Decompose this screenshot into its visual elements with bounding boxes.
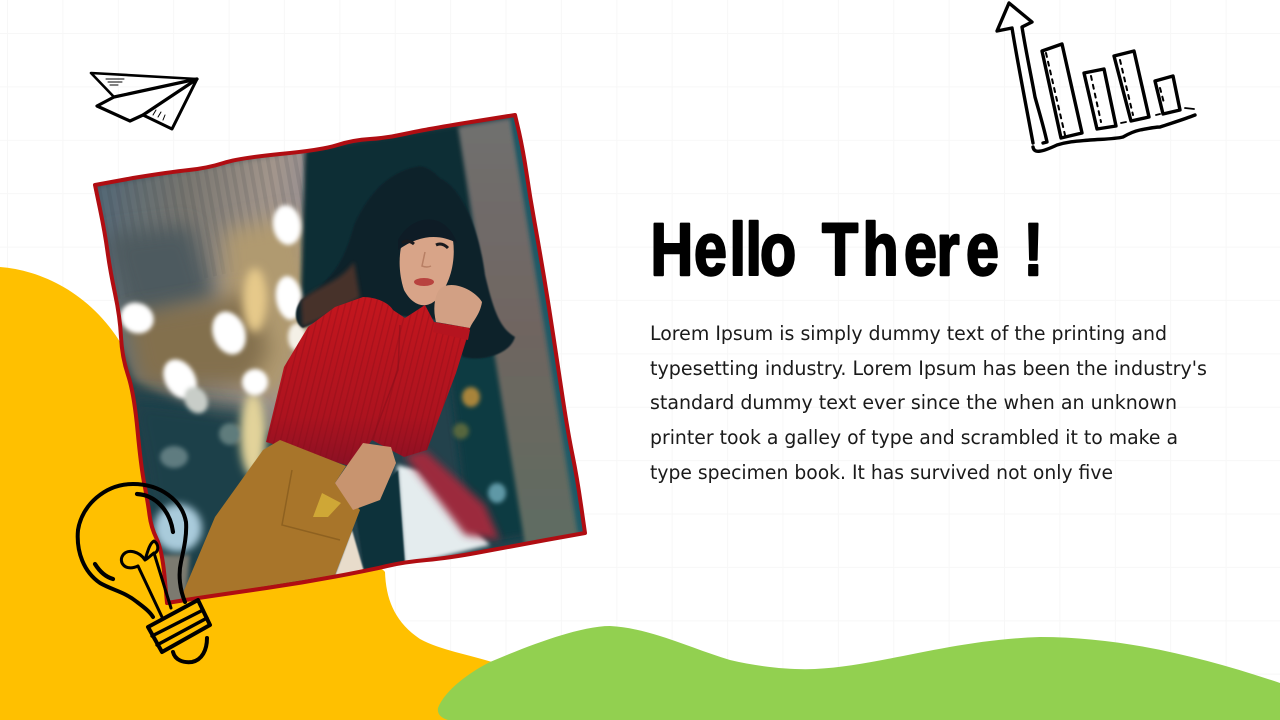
title: !	[1024, 209, 1043, 292]
body text: typesetting industry. Lorem Ipsum has been the industry's	[650, 357, 1207, 380]
body text: type specimen book. It has survived not only five	[650, 461, 1113, 484]
photo: woman leaning on a railing	[97, 118, 583, 600]
icon: light bulb	[78, 484, 210, 662]
yellow blob background	[0, 267, 492, 720]
green wave background	[438, 626, 1280, 720]
title: Hello	[650, 209, 813, 292]
body text: standard dummy text ever since the when an unknown	[650, 391, 1177, 414]
body text: Lorem Ipsum is simply dummy text of the printing and	[650, 322, 1167, 345]
icon: hand-drawn bar chart with arrow	[997, 3, 1195, 151]
framed photo	[93, 113, 587, 605]
title: There	[822, 209, 1015, 292]
body text	[650, 322, 1207, 484]
body text: printer took a galley of type and scrambled it to make a	[650, 426, 1178, 449]
red wavy photo frame	[95, 115, 585, 603]
icon: paper plane	[91, 73, 197, 129]
